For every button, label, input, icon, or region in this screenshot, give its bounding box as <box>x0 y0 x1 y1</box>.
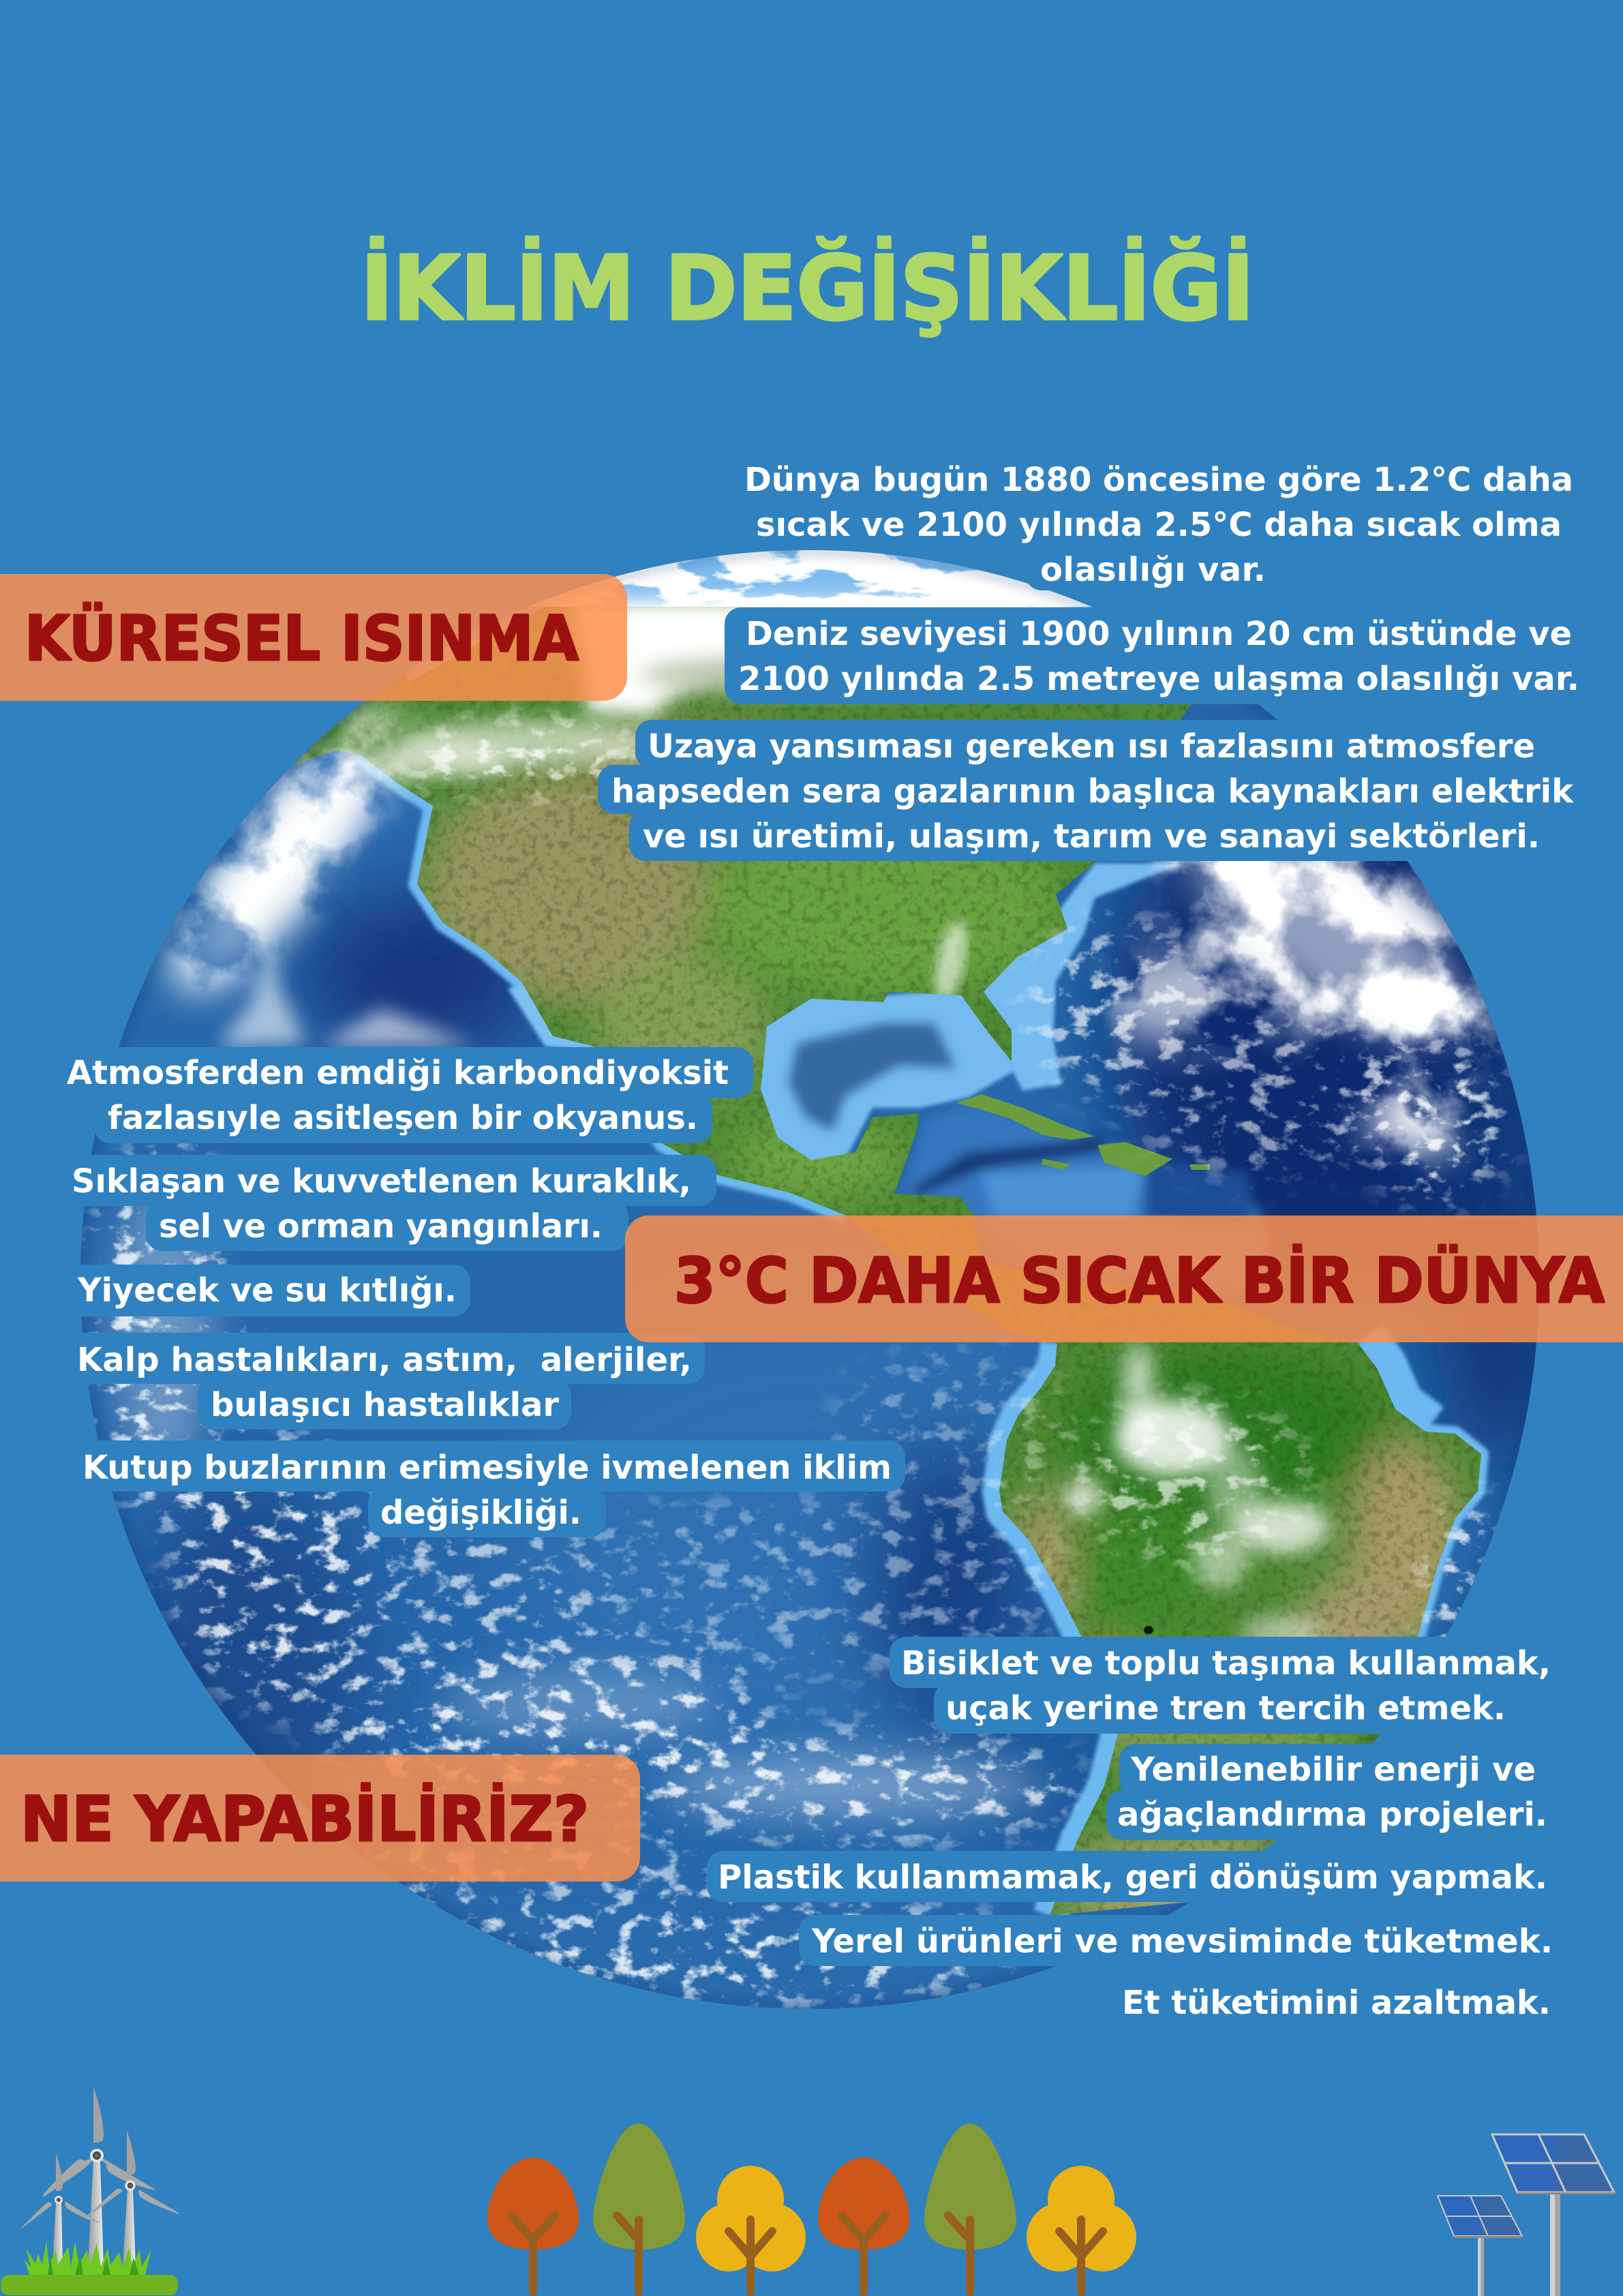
greenhouse gases text: Uzaya yansıması gereken ısı fazlasını atmosfere <box>648 727 1535 766</box>
plume of cloud in north pacific <box>218 934 477 1046</box>
banner: küresel ısınma <box>0 574 627 701</box>
sea level text: 2100 yılında 2.5 metreye ulaşma olasılığı var. <box>738 660 1579 698</box>
food and water text: Yiyecek ve su kıtlığı. <box>77 1271 457 1310</box>
local products text: Yerel ürünleri ve mevsiminde tüketmek. <box>811 1922 1553 1961</box>
text background bubbles <box>890 1637 1565 1734</box>
baja shelf <box>508 982 594 1046</box>
caribbean islands <box>956 1094 1210 1176</box>
large turbine <box>42 2087 155 2267</box>
large panel <box>1492 2134 1616 2296</box>
text block: temperature <box>731 458 1587 590</box>
ocean acidification text <box>67 1054 729 1137</box>
text block: drought and fires <box>58 1155 716 1251</box>
renewable energy text: Yenilenebilir enerji ve <box>1130 1751 1536 1789</box>
land <box>68 539 1554 2025</box>
atlantic shelf <box>975 863 1184 1091</box>
temperature text <box>744 461 1573 589</box>
banner heading: NE YAPABİLİRİZ? <box>20 1783 589 1856</box>
land grain <box>273 545 1500 1922</box>
tree: yellow <box>696 2166 806 2292</box>
temperature text: olasılığı var. <box>1040 551 1266 589</box>
text block: local products <box>799 1915 1566 1966</box>
text background bubbles <box>725 607 1595 704</box>
banner: ne yapabiliriz <box>0 1755 640 1882</box>
tree: yellow <box>1027 2166 1136 2292</box>
greenhouse gases text: hapseden sera gazlarının başlıca kaynakları elektrik <box>611 772 1574 811</box>
text block: sea level <box>725 607 1595 704</box>
americas coastal shelf <box>360 755 1481 1916</box>
transport text: uçak yerine tren tercih etmek. <box>945 1689 1506 1727</box>
limb shading <box>82 552 1538 2008</box>
icon: trees <box>487 2124 1136 2292</box>
tree: orange <box>487 2158 579 2292</box>
diseases text: Kalp hastalıkları, astım, alerjiler, <box>77 1341 692 1379</box>
text background bubble <box>799 1915 1566 1966</box>
text block: meat: Et tüketimini azaltmak. <box>1122 1984 1551 2022</box>
sea level text: Deniz seviyesi 1900 yılının 20 cm üstünde ve <box>746 615 1572 653</box>
text background bubbles <box>58 1155 716 1251</box>
polar ice text: değişikliği. <box>380 1494 581 1532</box>
transport text: Bisiklet ve toplu taşıma kullanmak, <box>901 1644 1551 1682</box>
ground <box>1 2275 178 2295</box>
diseases text: bulaşıcı hastalıklar <box>211 1386 559 1424</box>
banner heading: KÜRESEL ISINMA <box>25 602 579 675</box>
banner shape <box>0 574 627 701</box>
ocean base <box>80 704 1536 2009</box>
south america clouds <box>1065 1343 1329 1649</box>
icon: solar panels <box>1438 2134 1616 2296</box>
text block: diseases <box>63 1333 705 1430</box>
fine scattered clouds <box>68 539 1554 2025</box>
text block: food and water <box>63 1265 470 1316</box>
sea level text <box>738 615 1579 698</box>
greenhouse gases text <box>611 727 1574 856</box>
text block: polar ice <box>68 1440 905 1537</box>
text background bubble <box>707 1851 1561 1902</box>
ocean acidification text: Atmosferden emdiği karbondiyoksit <box>67 1054 729 1092</box>
small panel <box>1438 2196 1523 2296</box>
banner heading: 3°C DAHA SICAK BİR DÜNYA <box>674 1244 1605 1317</box>
text block: transport <box>890 1637 1565 1734</box>
drought and fires text: sel ve orman yangınları. <box>159 1207 603 1245</box>
tree: green <box>593 2124 685 2292</box>
greenhouse gases text: ve ısı üretimi, ulaşım, tarım ve sanayi sektörleri. <box>643 817 1540 856</box>
text block: ocean acidification <box>53 1047 753 1143</box>
text background bubbles <box>598 720 1588 861</box>
drought and fires text: Sıklaşan ve kuvvetlenen kuraklık, <box>72 1162 691 1200</box>
drought and fires text <box>72 1162 691 1245</box>
text block: greenhouse gases <box>598 720 1588 861</box>
arctic ice and snow <box>204 539 1431 778</box>
gulf of mexico <box>757 988 1016 1169</box>
land tones <box>423 723 1459 1922</box>
temperature text: Dünya bugün 1880 öncesine göre 1.2°C daha <box>744 461 1573 499</box>
text background bubbles <box>1106 1744 1562 1840</box>
icon: wind turbines <box>1 2087 179 2295</box>
medium turbine <box>87 2130 179 2267</box>
text background bubbles <box>731 458 1587 590</box>
diseases text <box>77 1341 692 1424</box>
polar ice text: Kutup buzlarının erimesiyle ivmelenen iklim <box>82 1449 892 1487</box>
polar ice text <box>82 1449 892 1532</box>
small turbine <box>21 2154 99 2267</box>
plastic text: Plastik kullanmamak, geri dönüşüm yapmak. <box>718 1858 1547 1897</box>
ocean acidification text: fazlasıyle asitleşen bir okyanus. <box>108 1099 698 1137</box>
heavy cloud masses <box>68 539 1554 2025</box>
tree: orange <box>818 2158 909 2292</box>
text background bubbles <box>68 1440 905 1537</box>
renewable energy text: ağaçlandırma projeleri. <box>1117 1796 1547 1834</box>
transport text <box>901 1644 1551 1727</box>
soft cloud haze <box>116 727 1493 1817</box>
text background bubble <box>63 1265 470 1316</box>
lake <box>1144 1626 1153 1634</box>
banner: 3°C daha sıcak bir dünya <box>625 1215 1623 1342</box>
title: İKLİM DEĞİŞİKLİĞİ <box>361 237 1254 340</box>
grass <box>25 2241 151 2275</box>
banner shape <box>0 1755 640 1882</box>
pale appalachian clouds <box>929 918 973 1004</box>
text background bubbles <box>63 1333 705 1430</box>
text block: renewable energy <box>1106 1744 1562 1840</box>
banner shape <box>625 1215 1623 1342</box>
temperature text: sıcak ve 2100 yılında 2.5°C daha sıcak olma <box>756 506 1562 544</box>
ocean shading <box>136 719 1536 1848</box>
caribbean sea <box>900 1104 1268 1295</box>
text background bubbles <box>53 1047 753 1143</box>
text block: plastic <box>707 1851 1561 1902</box>
tree: green <box>924 2124 1016 2292</box>
renewable energy text <box>1117 1751 1547 1834</box>
earth globe <box>68 539 1568 2025</box>
